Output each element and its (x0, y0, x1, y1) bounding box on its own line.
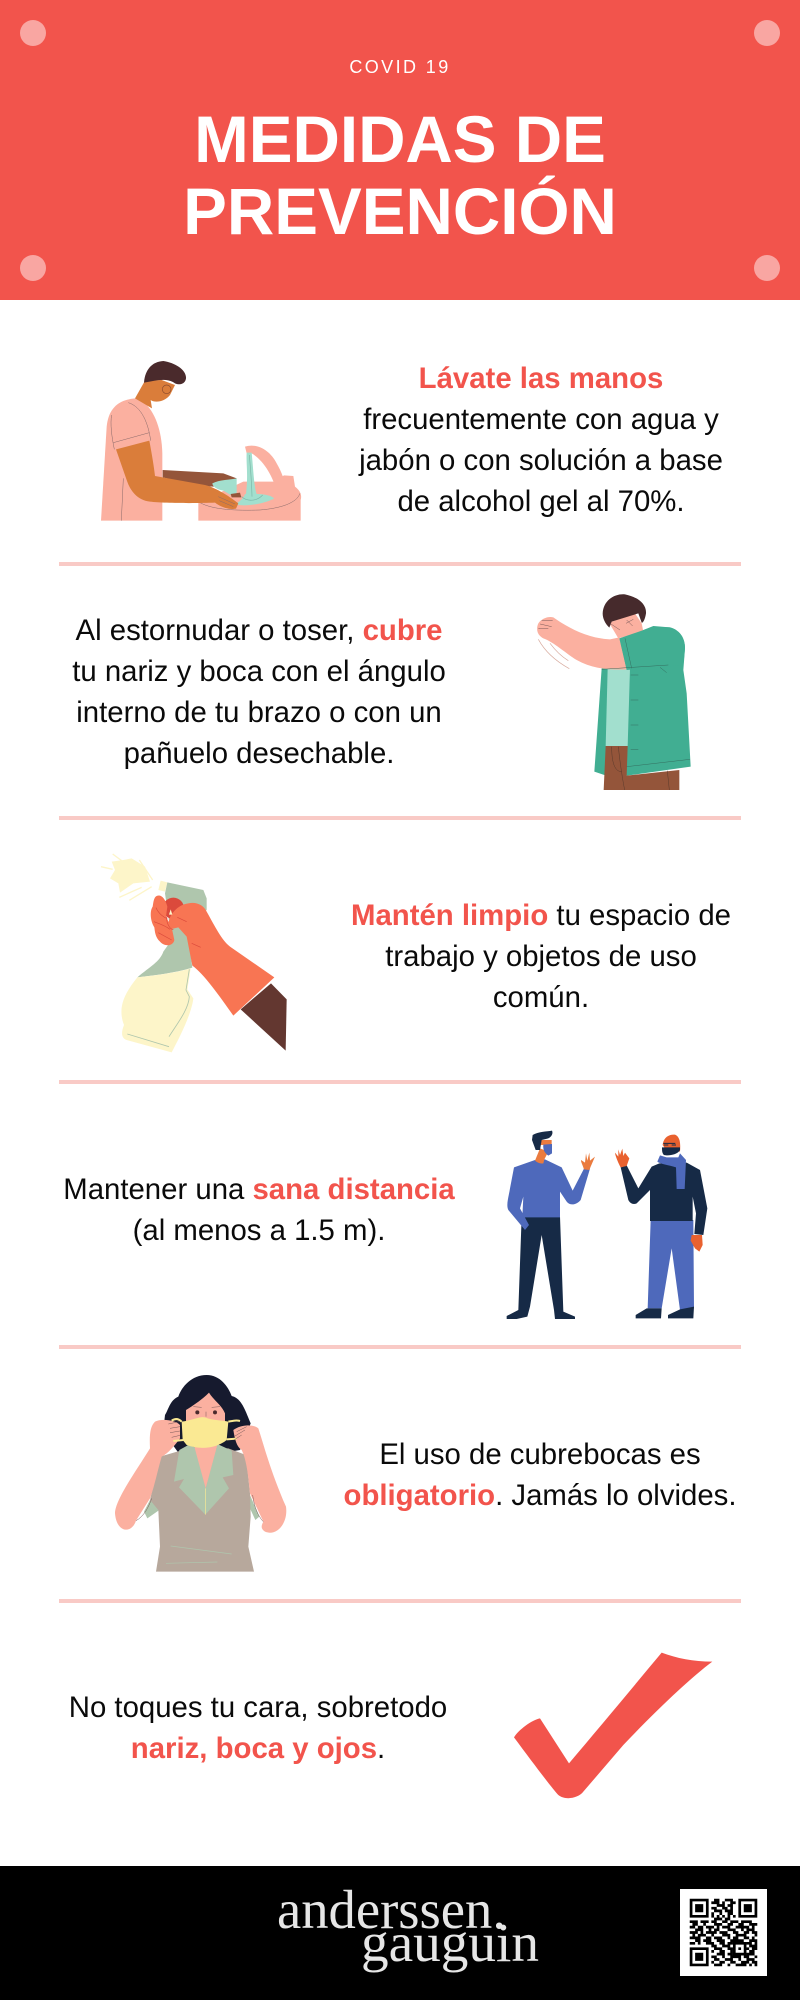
text: do not touch face (69, 1691, 447, 1765)
text: keep clean: común. (493, 981, 589, 1014)
panel: do not touch face (69, 1652, 712, 1798)
divider 3 (59, 1080, 741, 1084)
logo wordmark: anderssen. (277, 1879, 506, 1940)
logo wordmark (277, 1879, 539, 1973)
header banner (0, 0, 800, 300)
text: cover cough (72, 614, 446, 770)
corner dot bottom left (20, 255, 46, 281)
illustration: man washing hands (101, 361, 302, 521)
icon: check mark (514, 1652, 712, 1798)
divider 1 (59, 562, 741, 566)
text: cover cough: Al estornudar o toser, cubre (76, 614, 442, 647)
divider 2 (59, 816, 741, 820)
text: social distance (63, 1173, 455, 1247)
divider 4 (59, 1345, 741, 1349)
illustration: woman putting on a mask (115, 1375, 286, 1572)
text: social distance: (al menos a 1.5 m). (133, 1214, 385, 1247)
text: social distance: Mantener una sana distancia (63, 1173, 455, 1206)
text: cover cough: pañuelo desechable. (124, 737, 394, 770)
text: face mask: El uso de cubrebocas es (379, 1438, 701, 1471)
text: do not touch face: No toques tu cara, sobretodo (69, 1691, 447, 1724)
illustration: gloved hand holding spray bottle (100, 854, 287, 1052)
logo wordmark: gauguin (361, 1912, 539, 1973)
panel: social distance (63, 1130, 708, 1319)
text: face mask: obligatorio. Jamás lo olvides. (344, 1479, 736, 1512)
text: do not touch face: nariz, boca y ojos. (131, 1732, 385, 1765)
text: face mask (344, 1438, 736, 1512)
text: keep clean: trabajo y objetos de uso (385, 940, 697, 973)
text: keep clean: Mantén limpio tu espacio de (351, 899, 731, 932)
corner dot bottom right (754, 255, 780, 281)
eyebrow: COVID 19: COVID 19 (349, 57, 451, 77)
text: wash hands (358, 362, 723, 518)
panel: keep clean (100, 854, 731, 1052)
QR code (680, 1889, 767, 1976)
footer (0, 1866, 800, 2000)
panel: cover cough (72, 594, 691, 790)
illustration: person coughing into elbow (537, 594, 691, 790)
text: cover cough: tu nariz y boca con el ángulo (72, 655, 446, 688)
panel: wash hands (101, 361, 723, 521)
corner dot top left (20, 20, 46, 46)
text: wash hands: frecuentemente con agua y (363, 403, 719, 436)
text: wash hands: Lávate las manos (419, 362, 663, 395)
title (183, 103, 617, 248)
text: cover cough: interno de tu brazo o con un (76, 696, 442, 729)
title: PREVENCIÓN (183, 175, 617, 248)
text: wash hands: jabón o con solución a base (359, 444, 723, 477)
text: keep clean (351, 899, 731, 1014)
corner dot top right (754, 20, 780, 46)
illustration: two people keeping distance (506, 1130, 708, 1319)
text: wash hands: de alcohol gel al 70%. (397, 485, 685, 518)
divider 5 (59, 1599, 741, 1603)
title: MEDIDAS DE (194, 103, 606, 176)
panel: face mask (115, 1375, 736, 1572)
